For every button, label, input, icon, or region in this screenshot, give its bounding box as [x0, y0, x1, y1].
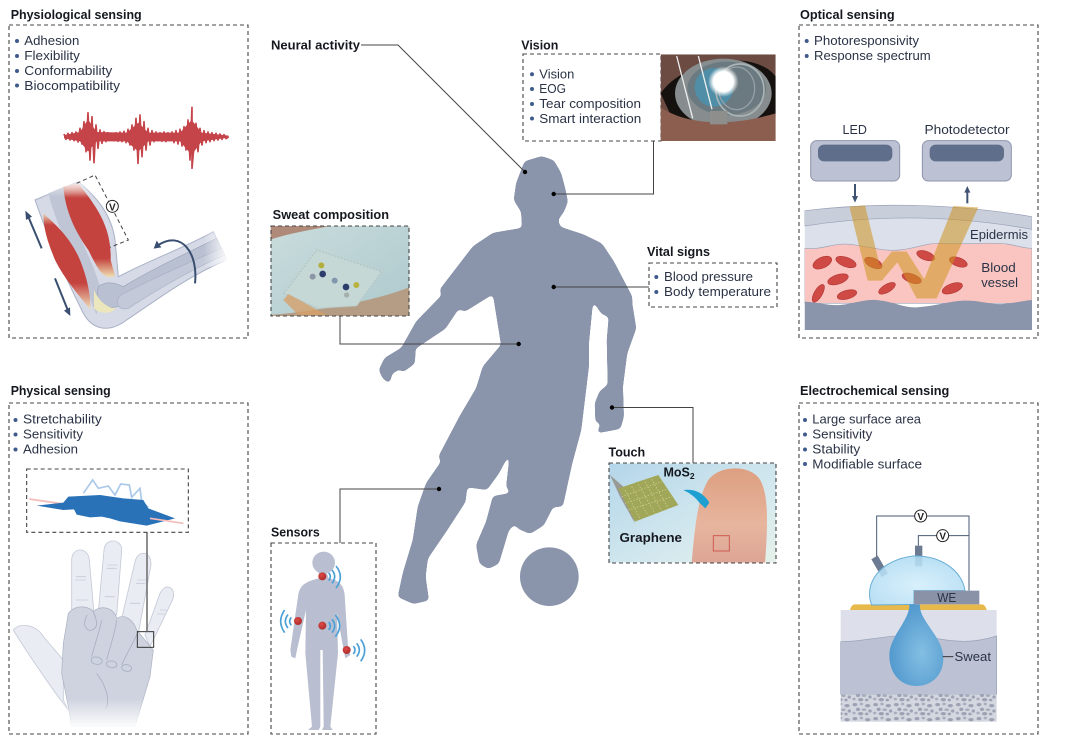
strain sensor graphic — [29, 480, 183, 526]
property list: Blood pressure — [664, 270, 753, 284]
leader line — [144, 532, 149, 632]
property list: Stability — [812, 442, 861, 456]
connector: neural activity — [361, 45, 527, 174]
frame — [649, 263, 777, 307]
voltmeter 2: V — [939, 532, 946, 543]
eye photo — [661, 54, 776, 141]
football — [520, 547, 579, 606]
panel: sensors — [271, 526, 376, 734]
property list: Conformability — [24, 64, 113, 78]
panel: physical sensing — [9, 384, 248, 734]
heading: Electrochemical sensing — [800, 384, 949, 398]
panel: vital signs — [647, 245, 777, 307]
LED device — [811, 141, 900, 181]
panel: optical sensing — [799, 8, 1038, 338]
connector: sensors — [340, 487, 441, 543]
labels: vessel — [981, 276, 1018, 290]
voltmeter — [106, 200, 118, 213]
property list — [15, 34, 121, 93]
gold electrode — [850, 604, 987, 610]
sensor zoom box on hand — [137, 632, 154, 647]
silhouette of footballer — [379, 157, 636, 606]
light path — [849, 205, 978, 298]
property list — [530, 67, 641, 126]
property list: Modifiable surface — [812, 458, 922, 472]
arrow: light in — [852, 184, 858, 203]
frame — [271, 543, 376, 734]
panel: physiological sensing — [9, 8, 248, 338]
label sweat: Sweat — [954, 650, 992, 664]
frame — [609, 463, 776, 563]
frame — [271, 226, 409, 316]
labels — [843, 123, 1028, 290]
working electrode — [914, 591, 979, 604]
label MoS2: MoS — [664, 466, 690, 480]
property list: Flexibility — [24, 49, 81, 63]
labels: Blood — [981, 261, 1016, 275]
label WE: WE — [937, 591, 956, 605]
frame — [523, 54, 661, 141]
property list: Tear composition — [539, 97, 641, 111]
panel frame — [799, 25, 1038, 338]
sensor nodes — [294, 572, 351, 654]
heading: Touch — [608, 446, 645, 460]
white fades at arm ends — [30, 173, 230, 267]
heading: Optical sensing — [800, 8, 895, 22]
heading: Physiological sensing — [11, 8, 142, 22]
photodetector device — [922, 141, 1011, 181]
property list: Response spectrum — [814, 49, 931, 63]
property list — [805, 34, 931, 63]
heading: Physical sensing — [11, 384, 111, 398]
connector: vision — [552, 141, 654, 196]
connector: touch — [610, 405, 693, 463]
voltmeter 1: V — [917, 512, 924, 523]
property list: Adhesion — [24, 34, 79, 48]
hand — [13, 541, 174, 728]
panel frame — [9, 25, 248, 338]
illustration: sweat electrochemical cell — [841, 510, 997, 722]
heading: Vital signs — [647, 245, 710, 259]
illustration: hand and strain sensor — [13, 469, 188, 728]
property list: Biocompatibility — [24, 79, 121, 93]
panel: electrochemical sensing — [799, 384, 1038, 734]
illustration: LED and photodetector on skin — [805, 141, 1032, 330]
voltmeter 1 — [915, 510, 927, 523]
property list: Stretchability — [23, 413, 103, 427]
property list: Photoresponsivity — [814, 34, 920, 48]
property list: EOG — [539, 82, 566, 96]
voltmeter 2 — [937, 530, 949, 543]
blood cells — [810, 248, 969, 304]
property list: Large surface area — [812, 413, 921, 427]
property list: Smart interaction — [539, 112, 641, 126]
labels: Photodetector — [924, 123, 1010, 137]
body — [290, 552, 350, 730]
sweat patch photo — [271, 226, 409, 316]
property list: Body temperature — [664, 285, 771, 299]
sweat drop — [889, 604, 943, 686]
heading: neural activity: Neural activity — [271, 38, 360, 52]
property list: Sensitivity — [812, 428, 873, 442]
dashed electrode loop — [77, 175, 128, 247]
panel: sweat composition — [271, 208, 409, 316]
panel: touch — [608, 446, 776, 563]
skin layers — [805, 205, 1032, 330]
property list: Adhesion — [23, 442, 78, 456]
heading: Sweat composition — [273, 208, 389, 222]
electrodes — [871, 546, 922, 577]
panel frame — [9, 403, 248, 734]
inset frame — [27, 469, 188, 532]
illustration: EMG waveform and arm — [25, 107, 230, 328]
skin layers — [841, 610, 997, 722]
wires — [877, 516, 969, 591]
property list — [654, 270, 771, 299]
connector: vital signs — [552, 285, 649, 289]
wireless waves — [281, 566, 365, 661]
labels: Epidermis — [970, 228, 1028, 242]
label graphene: Graphene — [620, 531, 682, 545]
panel: vision — [521, 39, 776, 141]
property list: Sensitivity — [23, 428, 84, 442]
sweat dome — [870, 556, 965, 605]
heading: Sensors — [271, 526, 320, 540]
panel frame — [799, 403, 1038, 734]
touch photo — [609, 463, 776, 563]
motion arrows — [25, 211, 195, 316]
EMG waveform — [64, 107, 229, 168]
arrow: light out — [964, 186, 970, 203]
arm with muscles — [35, 182, 227, 328]
human body with sensors — [281, 552, 365, 730]
property list: Vision — [539, 67, 574, 81]
voltmeter: V — [109, 202, 116, 213]
connector: sweat composition — [340, 316, 521, 346]
sweat leader — [943, 655, 953, 658]
property list — [803, 413, 922, 472]
heading: Vision — [521, 39, 558, 53]
body silhouette — [379, 157, 636, 603]
labels: LED — [843, 123, 867, 137]
property list — [14, 413, 103, 456]
label MoS2: 2 — [690, 471, 695, 481]
